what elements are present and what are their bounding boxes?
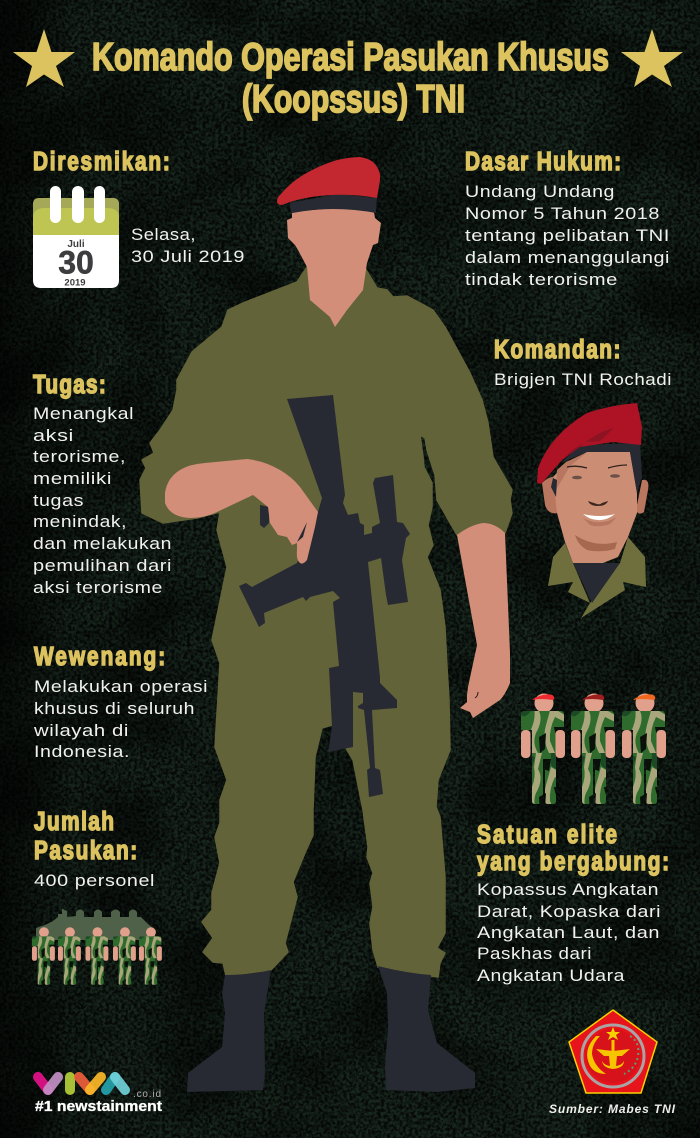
text: wewenang: Indonesia. xyxy=(34,742,130,761)
text: satuan elite: Darat, Kopaska dari xyxy=(477,902,661,921)
icon: calendar xyxy=(33,186,119,288)
icon: calendar: Juli xyxy=(67,239,85,250)
text: dasar hukum: tindak terorisme xyxy=(465,270,618,289)
text: dasar hukum: dalam menanggulangi xyxy=(465,248,670,267)
panel: jumlah pasukan xyxy=(32,807,162,985)
title: (Koopssus) TNI xyxy=(242,78,465,121)
panel: tugas xyxy=(33,370,172,597)
text: tugas: aksi xyxy=(33,426,74,445)
icon: left star xyxy=(13,29,75,87)
beret band xyxy=(290,194,377,213)
heading: wewenang: Wewenang: xyxy=(34,642,165,671)
soldier face xyxy=(287,209,381,327)
text: satuan elite: Angkatan Laut, dan xyxy=(477,923,660,942)
text: tugas: tugas xyxy=(33,491,84,510)
text: wewenang: Melakukan operasi xyxy=(34,677,208,696)
panel: wewenang xyxy=(33,642,208,761)
text: jumlah pasukan: 400 personel xyxy=(34,871,155,890)
icon: right star xyxy=(621,29,683,87)
logo: VIVA: .co.id xyxy=(133,1089,161,1100)
text: komandan name: Brigjen TNI Rochadi xyxy=(494,370,672,389)
text: tugas: dan melakukan xyxy=(33,534,172,553)
heading: satuan elite: yang bergabung: xyxy=(477,847,669,876)
heading: satuan elite: Satuan elite xyxy=(477,820,617,849)
text: satuan elite xyxy=(477,880,661,985)
text: satuan elite: Kopassus Angkatan xyxy=(477,880,659,899)
soldier figure xyxy=(140,157,512,1092)
heading: jumlah pasukan: Pasukan: xyxy=(34,836,137,865)
panel: komandan xyxy=(494,335,672,618)
text: wewenang xyxy=(33,677,208,761)
date text xyxy=(131,225,245,266)
heading: tugas: Tugas: xyxy=(33,370,106,399)
heading: satuan elite xyxy=(477,820,669,876)
text: tugas xyxy=(33,404,172,597)
logo: VIVA: #1 newstainment xyxy=(35,1098,162,1115)
heading: jumlah pasukan: Jumlah xyxy=(34,807,114,836)
rifle xyxy=(239,395,410,797)
date text: 30 Juli 2019 xyxy=(131,247,245,266)
panel: dasar hukum xyxy=(465,147,670,289)
portrait: commander xyxy=(537,403,648,618)
text: tugas: aksi terorisme xyxy=(33,578,163,597)
text: tugas: pemulihan dari xyxy=(33,556,172,575)
rifle grip xyxy=(260,505,269,528)
icon: TNI emblem xyxy=(569,1010,657,1093)
text: wewenang: wilayah di xyxy=(33,721,129,740)
text: dasar hukum: tentang pelibatan TNI xyxy=(465,226,670,245)
text: tugas: menindak, xyxy=(33,512,127,531)
icon: squad xyxy=(32,908,162,985)
title xyxy=(92,36,609,121)
icon: calendar: 30 xyxy=(58,244,94,280)
text: satuan elite: Angkatan Udara xyxy=(477,966,625,985)
heading: dasar hukum: Dasar Hukum: xyxy=(465,147,621,176)
logo: VIVA xyxy=(35,1077,162,1115)
heading: komandan: Komandan: xyxy=(494,335,620,364)
heading: diresmikan: Diresmikan: xyxy=(33,147,170,176)
text: wewenang: khusus di seluruh xyxy=(34,699,195,718)
text: satuan elite: Paskhas dari xyxy=(477,944,592,963)
panel: satuan elite xyxy=(477,694,669,985)
text: tugas: memiliki xyxy=(33,469,112,488)
text: dasar hukum xyxy=(465,182,670,289)
soldier left arm xyxy=(165,459,318,564)
text: tugas: terorisme, xyxy=(33,447,126,466)
text: tugas: Menangkal xyxy=(33,404,134,423)
source credit: Sumber: Mabes TNI xyxy=(549,1102,676,1116)
text: dasar hukum: Undang Undang xyxy=(465,182,615,201)
trigger xyxy=(297,522,307,542)
heading: jumlah pasukan xyxy=(34,807,137,865)
text: dasar hukum: Nomor 5 Tahun 2018 xyxy=(465,204,660,223)
soldier uniform xyxy=(140,267,512,977)
soldier right arm xyxy=(457,523,510,718)
beret xyxy=(277,157,380,205)
soldier boots xyxy=(187,966,475,1092)
icon: calendar: 2019 xyxy=(64,278,86,288)
icon: three soldiers xyxy=(521,694,666,804)
panel: diresmikan xyxy=(33,147,245,288)
date text: Selasa, xyxy=(131,225,196,244)
